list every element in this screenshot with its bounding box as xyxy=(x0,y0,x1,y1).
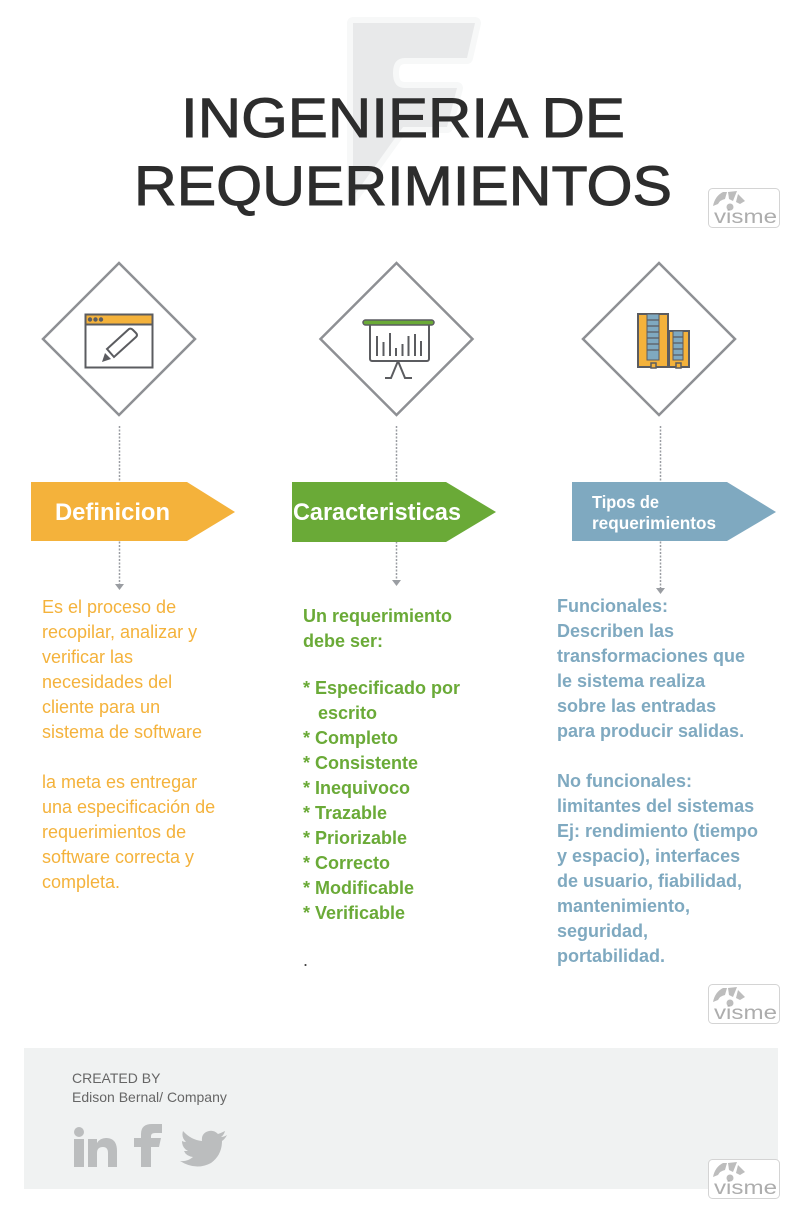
text block: tipos de requerimientos: Funcionales: xyxy=(557,596,668,616)
text block: caracteristicas: * Especificado por xyxy=(303,678,460,698)
text block: tipos de requerimientos: mantenimiento, xyxy=(557,896,690,916)
text block: definicion: completa. xyxy=(42,872,120,892)
text block: definicion xyxy=(42,597,215,892)
text block: tipos de requerimientos: de usuario, fiabilidad, xyxy=(557,871,742,891)
icon: facebook xyxy=(134,1124,162,1167)
diamond icon: server towers xyxy=(583,263,735,415)
visme logo middle xyxy=(708,984,780,1024)
title xyxy=(134,86,672,217)
text block: definicion: software correcta y xyxy=(42,847,194,867)
text block: tipos de requerimientos: le sistema realiza xyxy=(557,671,706,691)
text block: caracteristicas: Un requerimiento xyxy=(303,606,452,626)
visme logo top xyxy=(708,188,780,228)
text block: caracteristicas: * Modificable xyxy=(303,878,414,898)
text block: caracteristicas: debe ser: xyxy=(303,631,383,651)
text block: tipos de requerimientos: No funcionales: xyxy=(557,771,692,791)
text block: caracteristicas: escrito xyxy=(318,703,377,723)
visme logo bottom xyxy=(708,1160,780,1199)
text block: caracteristicas: * Consistente xyxy=(303,753,418,773)
banner: Caracteristicas: Caracteristicas xyxy=(293,499,461,526)
text block: tipos de requerimientos: sobre las entradas xyxy=(557,696,716,716)
title: REQUERIMIENTOS xyxy=(134,154,672,217)
banner: Tipos de requerimientos: Tipos de xyxy=(592,492,659,512)
text block: caracteristicas: * Inequivoco xyxy=(303,778,410,798)
text block: tipos de requerimientos: portabilidad. xyxy=(557,946,665,966)
text block: caracteristicas: * Correcto xyxy=(303,853,390,873)
text block: definicion: sistema de software xyxy=(42,722,202,742)
banner: Definicion xyxy=(31,482,235,541)
text block: caracteristicas: * Priorizable xyxy=(303,828,407,848)
text block: caracteristicas: * Verificable xyxy=(303,903,405,923)
text block: tipos de requerimientos: seguridad, xyxy=(557,921,648,941)
text block: caracteristicas: * Trazable xyxy=(303,803,387,823)
banner: Definicion: Definicion xyxy=(55,499,170,526)
text block: definicion: requerimientos de xyxy=(42,822,186,842)
text block: caracteristicas xyxy=(303,606,460,970)
footer panel xyxy=(24,1048,778,1189)
banner: Tipos de requerimientos: requerimientos xyxy=(592,513,716,533)
banner: Tipos de requerimientos xyxy=(572,482,776,541)
watermark logo xyxy=(353,23,475,197)
text block: caracteristicas: * Completo xyxy=(303,728,398,748)
text block: definicion: necesidades del xyxy=(42,672,172,692)
connector arrow: definicion xyxy=(115,426,124,590)
text block: tipos de requerimientos: Describen las xyxy=(557,621,674,641)
text block: definicion: Es el proceso de xyxy=(42,597,176,617)
icon: linkedin xyxy=(74,1127,117,1167)
text block: tipos de requerimientos: y espacio), interfaces xyxy=(557,846,740,866)
diamond icon: presentation board xyxy=(320,263,472,415)
text block: definicion: la meta es entregar xyxy=(42,772,197,792)
footer credit text: Edison Bernal/ Company xyxy=(72,1089,227,1105)
footer credit text xyxy=(72,1070,227,1105)
text block: tipos de requerimientos: Ej: rendimiento (tiempo xyxy=(557,821,758,841)
text block: tipos de requerimientos xyxy=(557,596,758,966)
diamond icon: browser with pencil xyxy=(43,263,195,415)
footer credit text: CREATED BY xyxy=(72,1070,161,1086)
text block: definicion: cliente para un xyxy=(42,697,160,717)
text block: definicion: verificar las xyxy=(42,647,133,667)
banner: Caracteristicas xyxy=(292,482,496,542)
text block: tipos de requerimientos: para producir salidas. xyxy=(557,721,744,741)
text block: tipos de requerimientos: limitantes del sistemas xyxy=(557,796,754,816)
connector arrow: caracteristicas xyxy=(392,426,401,586)
icon: twitter xyxy=(180,1131,227,1167)
text block: definicion: recopilar, analizar y xyxy=(42,622,197,642)
text block: caracteristicas: . xyxy=(303,950,308,970)
visme logo top: visme xyxy=(714,207,777,228)
text block: definicion: una especificación de xyxy=(42,797,215,817)
connector arrow: tipos xyxy=(656,426,665,594)
visme logo bottom: visme xyxy=(714,1178,777,1199)
visme logo middle: visme xyxy=(714,1003,777,1024)
text block: tipos de requerimientos: transformaciones que xyxy=(557,646,745,666)
title: INGENIERIA DE xyxy=(181,86,625,149)
